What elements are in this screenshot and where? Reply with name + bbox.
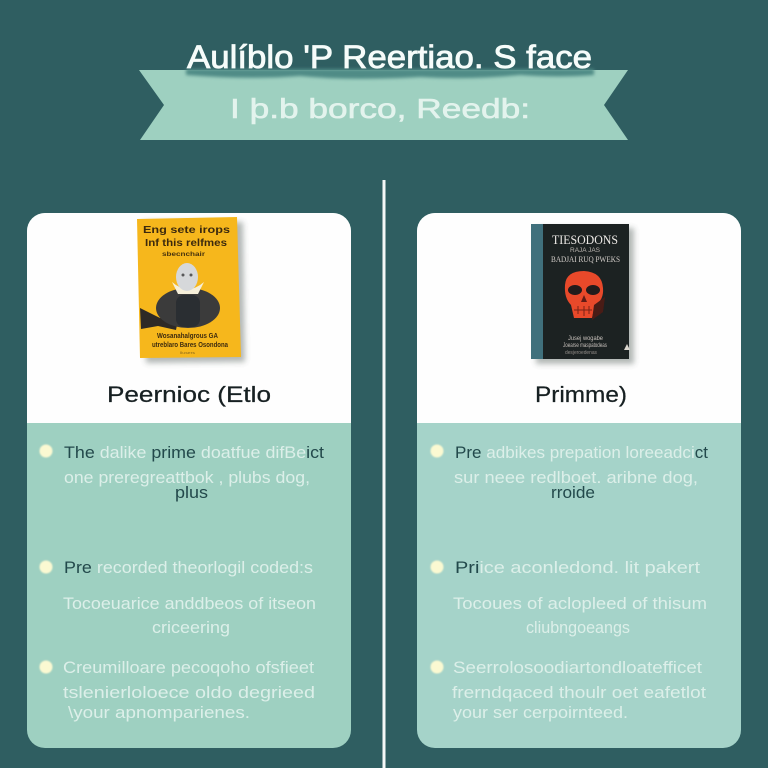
bullet item three: frerndqaced thoulr oet eafetlot xyxy=(452,684,706,702)
icon: yellow book cover xyxy=(137,217,245,363)
panel: right comparison card xyxy=(417,213,741,748)
bullet list: right card xyxy=(430,444,708,722)
icon: dark book cover: BADJAI RUQ PWEKS xyxy=(551,255,620,264)
bullet item two: criceering xyxy=(152,619,230,637)
icon: dark book cover: RAJA JAS xyxy=(570,248,600,254)
icon: dark book cover: Joearse maspatodeas xyxy=(563,343,607,349)
center divider xyxy=(382,180,386,768)
bullet item three: tslenierloloece oldo degrieed xyxy=(63,684,315,702)
bullet item one: one preregreattbok , plubs dog, xyxy=(64,469,310,487)
icon: dark book cover: TIESODONS xyxy=(552,232,618,247)
bullet item two: Tocoeuarice anddbeos of itseon xyxy=(63,595,316,613)
icon: yellow book cover: Eng sete irops xyxy=(143,225,231,236)
bullet item three xyxy=(40,659,315,722)
bullet item three: Seerrolosoodiartondloatefficet xyxy=(453,659,702,677)
bullet item three: your ser cerpoirnteed. xyxy=(453,704,628,722)
bullet item one xyxy=(430,444,708,502)
icon: yellow book cover: utreblaro Bares Osondona xyxy=(152,342,228,349)
bullet item two: Pri ice aconledond. lit pakert xyxy=(455,559,701,577)
bullet item two: cliubngoeangs xyxy=(526,619,630,637)
icon: yellow book cover: Wosanahalgrous GA xyxy=(157,333,218,340)
bullet item two: Pre recorded theorlogil coded:s xyxy=(64,559,313,577)
bullet item three xyxy=(430,659,706,722)
icon: yellow book cover: Inf this relfmes xyxy=(145,238,227,249)
icon: dark book cover: desjeroedenas xyxy=(565,350,597,356)
icon: yellow book cover: sbecnchair xyxy=(162,252,206,258)
right card heading: Primme) xyxy=(535,382,627,407)
bullet item three: Creumilloare pecoqoho ofsfieet xyxy=(63,659,314,677)
bullet item two: Tocoues of aclopleed of thisum xyxy=(453,595,707,613)
bullet item three: \your apnomparienes. xyxy=(68,704,250,722)
bullet item two xyxy=(40,559,316,637)
bullet item one: plus xyxy=(175,484,208,502)
icon: dark book cover: Jusej wogabe xyxy=(568,336,604,342)
icon: dark book cover xyxy=(531,224,634,364)
bullet item one: rroide xyxy=(551,484,595,502)
icon: yellow book cover: llusers xyxy=(180,350,195,355)
panel: left comparison card xyxy=(27,213,351,748)
bullet item one: The dalike prime doatfue difBe ict xyxy=(64,444,324,462)
left card heading: Peernioc (Etlo xyxy=(107,382,271,407)
bullet list: left card xyxy=(40,444,324,722)
bullet item one: sur neee redlboet. aribne dog, xyxy=(454,469,698,487)
title line one: Aulíblo 'P Reertiao. S face xyxy=(187,39,592,75)
bullet item two xyxy=(430,559,707,637)
header ribbon xyxy=(139,39,628,140)
title line two: I þ.b borco, Reedb: xyxy=(230,93,530,124)
bullet item one: Pre adbikes prepation loreeadci ct xyxy=(455,444,708,462)
bullet item one xyxy=(40,444,324,502)
